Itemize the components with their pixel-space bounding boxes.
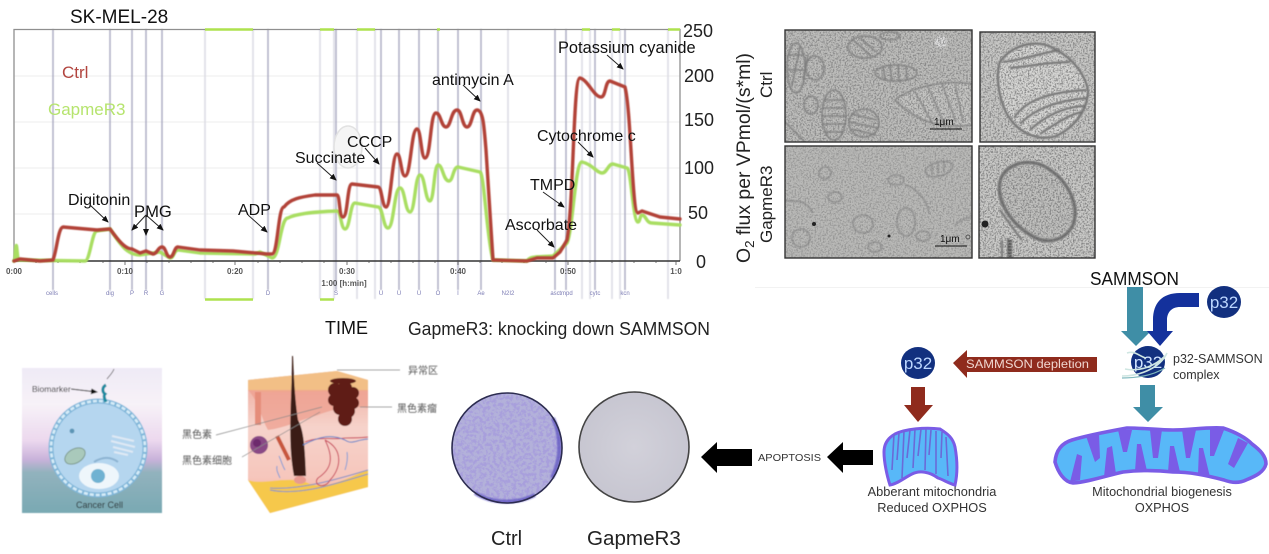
annotations: reagents with arrows: Potassium cyanide	[558, 39, 696, 57]
x axis time labels: 1:00 [h:min]	[321, 279, 367, 288]
y axis numbers: 250	[683, 21, 713, 41]
petri dish: GapmeR3	[579, 392, 689, 502]
arrow: complex to biogenesis	[1133, 385, 1163, 422]
injection event labels: U	[417, 291, 421, 297]
EM row label: GapmeR3: GapmeR3	[757, 166, 776, 243]
illustration: cancer cell	[22, 368, 162, 513]
arrow: to apoptosis	[827, 442, 873, 473]
mitochondrion: healthy	[1055, 428, 1266, 483]
Chinese labels: 黑色素细胞	[182, 454, 232, 467]
Chinese labels: 黑色素	[182, 428, 212, 441]
molecule: free p32: p32	[1210, 293, 1238, 312]
melanoma cluster	[328, 378, 359, 426]
injection event labels: U	[379, 291, 383, 297]
injection event labels: I	[457, 291, 459, 297]
dermis folds	[248, 390, 368, 430]
label: aberrant mitochondria: Abberant mitochondria	[868, 484, 997, 499]
y axis title: 2	[742, 241, 757, 248]
label: mitochondrial biogenesis: OXPHOS	[1135, 501, 1189, 515]
annotations: reagents with arrows: Succinate	[295, 150, 365, 167]
legend: GapmeR3: GapmeR3	[48, 100, 125, 119]
EM panel: Ctrl mitochondrion	[980, 32, 1095, 142]
x axis time labels: 1:0	[670, 267, 682, 276]
label: mitochondrial biogenesis: Mitochondrial biogenesis	[1092, 485, 1232, 499]
molecule: free p32	[1207, 286, 1241, 318]
x axis time labels: 0:00	[6, 267, 23, 276]
Ctrl trace	[14, 78, 680, 261]
annotations: reagents with arrows: Ascorbate	[505, 217, 577, 234]
molecule: released p32: p32	[904, 354, 932, 373]
label: aberrant mitochondria: Reduced OXPHOS	[877, 500, 987, 515]
chart: oxygen flux trace	[6, 7, 714, 300]
arrow: p32 to complex	[1147, 293, 1199, 346]
x axis time labels: 0:20	[227, 267, 244, 276]
x axis title: TIME	[325, 318, 368, 338]
injection event labels: asc	[550, 291, 560, 297]
arrow: SAMMSON depletion	[953, 350, 1097, 378]
biomarker	[107, 369, 114, 379]
Chinese labels: 异常区	[408, 364, 438, 377]
x axis time labels: 0:30	[339, 267, 356, 276]
injection event labels: Ae	[477, 291, 485, 297]
injection event labels: cells	[46, 291, 58, 297]
EM panel: GapmeR3 mitochondrion	[979, 146, 1095, 258]
illustration: cancer cell: Biomarker	[32, 384, 71, 394]
y axis numbers: 150	[684, 110, 714, 130]
annotations: reagents with arrows: Digitonin	[68, 192, 130, 209]
label: complex: p32-SAMMSON	[1173, 352, 1263, 366]
x axis time labels: 0:10	[117, 267, 134, 276]
injection event labels: N2I2	[502, 291, 515, 297]
EM row label: Ctrl: Ctrl	[757, 72, 776, 98]
arrow: SAMMSON depletion: SAMMSON depletion	[966, 359, 1089, 371]
injection event labels: R	[144, 291, 149, 297]
EM panel: Ctrl overview	[785, 30, 972, 142]
y axis numbers: 0	[696, 252, 706, 272]
EM panel: GapmeR3 overview	[785, 146, 972, 258]
injection event labels: G	[160, 291, 165, 297]
illustration: skin section with melanoma	[182, 356, 438, 513]
EM panel: GapmeR3 overview: 1μm	[940, 234, 960, 245]
y axis numbers: 100	[684, 158, 714, 178]
arrow: SAMMSON to complex	[1121, 287, 1151, 346]
annotations: reagents with arrows: Cytochrome c	[537, 128, 636, 145]
annotations: reagents with arrows: TMPD	[530, 177, 575, 194]
x axis time labels: 0:50	[560, 267, 577, 276]
heading: SAMMSON: SAMMSON	[1090, 269, 1179, 289]
annotations: reagents with arrows: CCCP	[347, 134, 392, 151]
mitochondrion: aberrant	[884, 428, 957, 485]
petri dish: Ctrl	[450, 392, 564, 504]
injection event labels	[46, 291, 630, 297]
injection event labels: kcn	[620, 291, 630, 297]
cell body	[51, 401, 145, 495]
annotations: reagents with arrows: antimycin A	[432, 72, 514, 89]
label: complex: complex	[1173, 368, 1220, 382]
x axis time labels	[6, 267, 682, 288]
x axis time labels: 0:40	[450, 267, 467, 276]
label: Ctrl dish: Ctrl	[491, 528, 522, 550]
molecule: p32-SAMMSON complex: p32	[1134, 353, 1162, 372]
chart title: SK-MEL-28	[70, 7, 168, 28]
y axis numbers	[683, 21, 714, 272]
green top bars	[205, 30, 680, 300]
leader lines	[216, 370, 400, 457]
y axis title: flux per VPmol/(s*ml)	[734, 53, 755, 241]
annotations: reagents with arrows: PMG	[134, 202, 172, 221]
injection event labels: D	[266, 291, 271, 297]
injection event labels: O	[436, 291, 441, 297]
injection event labels: cytc	[590, 291, 600, 297]
illustration: cancer cell: Cancer Cell	[76, 500, 123, 510]
injection event labels: U	[397, 291, 401, 297]
injection event labels: dig	[106, 291, 114, 297]
GapmeR3 trace	[14, 162, 680, 261]
injection event labels: P	[130, 291, 134, 297]
Chinese labels	[182, 364, 438, 467]
y axis numbers: 50	[688, 203, 708, 223]
EM panel: Ctrl overview: 1μm	[934, 117, 954, 128]
label: apoptosis: APOPTOSIS	[758, 452, 821, 464]
Chinese labels: 黑色素瘤	[397, 402, 437, 415]
arrow: p32 to aberrant mitochondria	[904, 387, 933, 422]
legend: Ctrl: Ctrl	[62, 63, 88, 82]
molecule: p32-SAMMSON complex	[1122, 346, 1167, 378]
molecule: released p32	[901, 347, 935, 379]
annotations: reagents with arrows	[68, 39, 696, 247]
injection event labels: tmpd	[559, 291, 573, 297]
annotations: reagents with arrows: ADP	[238, 202, 271, 219]
y axis title: O	[734, 248, 755, 263]
arrow: to dishes	[701, 442, 752, 473]
injection event labels: S	[334, 291, 338, 297]
label: GapmeR3 dish: GapmeR3	[587, 527, 681, 550]
y axis numbers: 200	[684, 66, 714, 86]
GapmeR3 note: GapmeR3: knocking down SAMMSON	[408, 319, 710, 339]
